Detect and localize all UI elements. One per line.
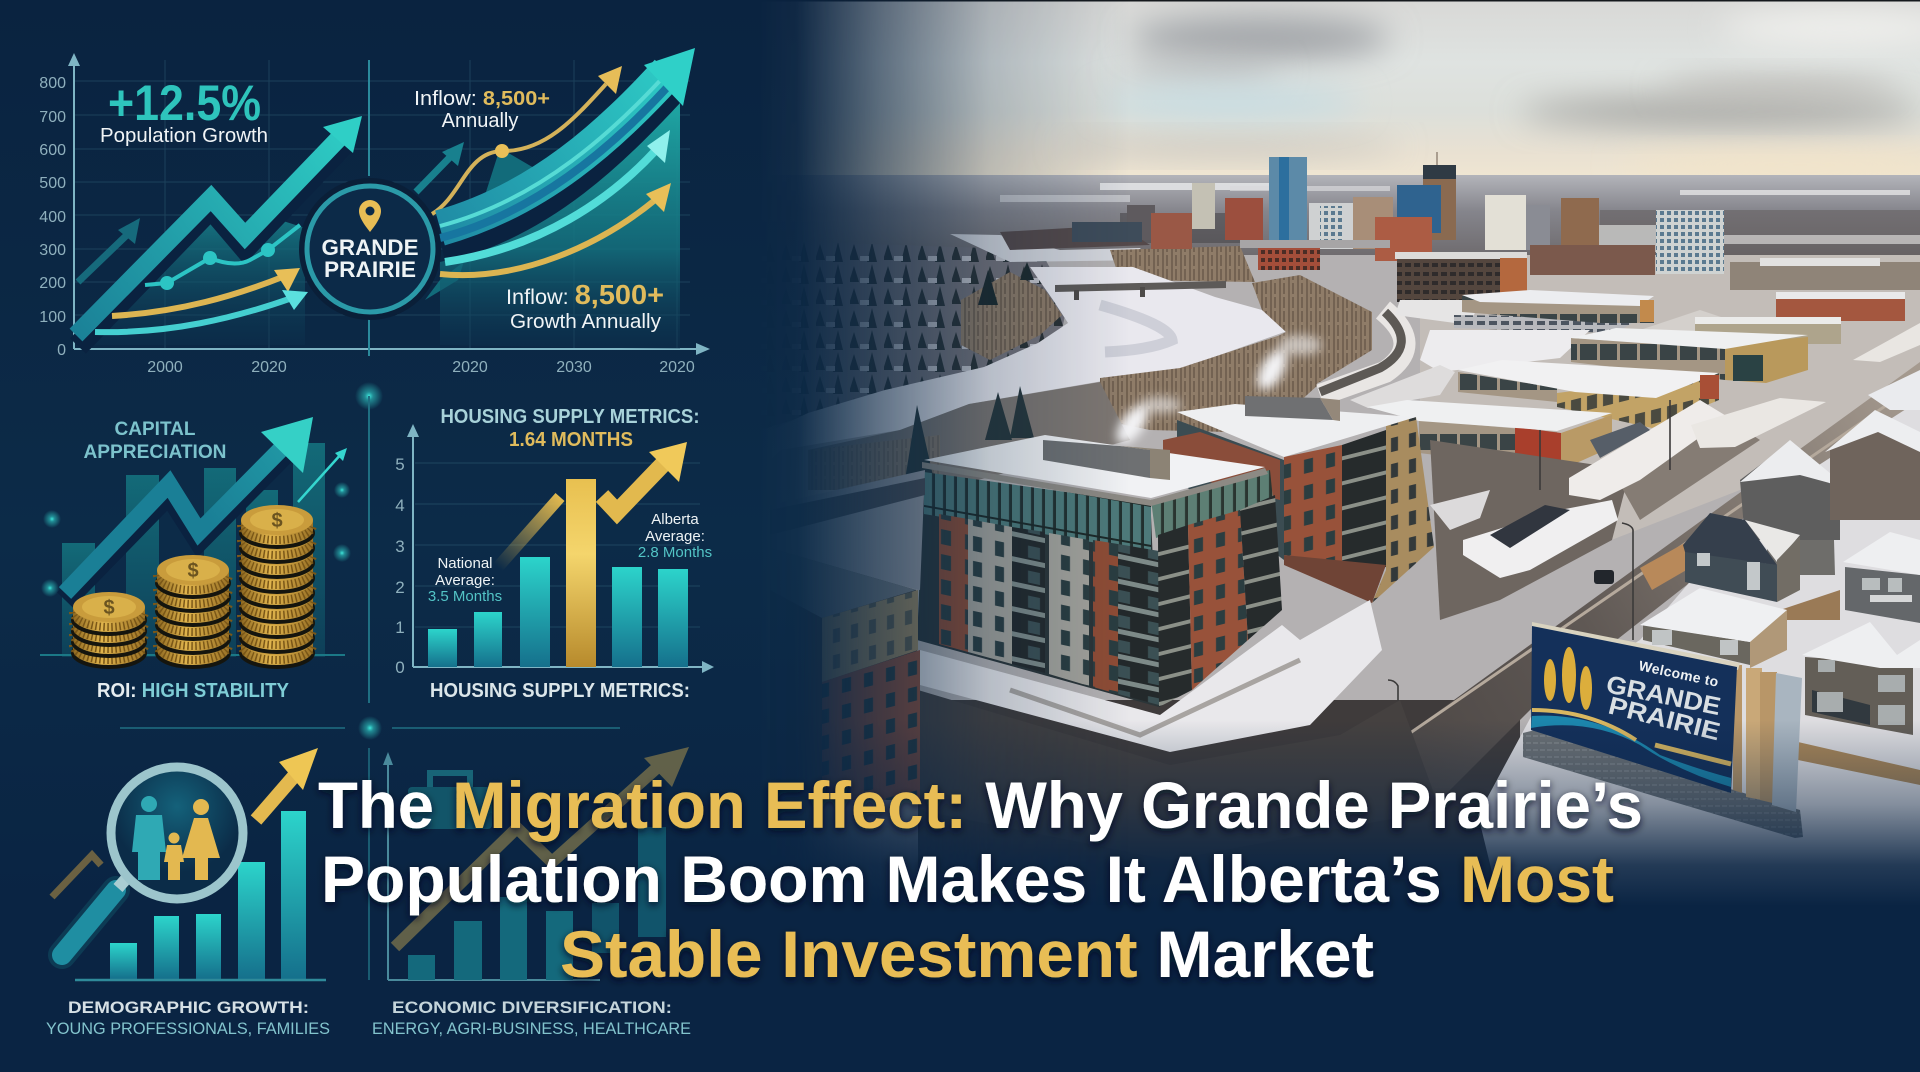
y axis labels bbox=[395, 455, 405, 677]
apartment building B bbox=[1163, 396, 1434, 603]
panel: capital appreciation bbox=[40, 417, 351, 702]
stat: population growth: Population Growth bbox=[100, 125, 268, 147]
small arrow right bbox=[416, 142, 464, 192]
stat: population growth: +12.5% bbox=[108, 75, 261, 131]
panel: economic diversification bbox=[369, 747, 691, 1038]
lower left bank bbox=[808, 382, 1130, 490]
y axis labels: 3 bbox=[395, 537, 405, 556]
heading: capital appreciation: CAPITAL bbox=[114, 419, 196, 440]
icon: briefcase bbox=[408, 773, 492, 829]
gold arrow right bbox=[440, 183, 671, 275]
icon: woman figure bbox=[182, 799, 220, 880]
heading: housing supply: HOUSING SUPPLY METRICS: bbox=[440, 406, 700, 428]
house H5 bbox=[1843, 532, 1920, 623]
panel: population growth chart bbox=[39, 48, 710, 376]
bars bbox=[428, 557, 688, 667]
label: inflow lower bbox=[506, 279, 664, 333]
brown bank trees west bbox=[961, 262, 1062, 360]
thin gold arrow bbox=[432, 66, 622, 214]
cross street bbox=[918, 690, 1440, 860]
icon: wheat stalks bbox=[1544, 647, 1592, 710]
highlighted gold bar bbox=[566, 479, 596, 667]
bars bbox=[110, 811, 306, 979]
location badge: GRANDE bbox=[322, 235, 418, 260]
x axis labels: 2000 bbox=[147, 359, 183, 376]
welcome sign: Welcome to bbox=[1637, 657, 1720, 690]
faded arrow bbox=[395, 747, 689, 947]
x axis labels: 2030 bbox=[556, 359, 592, 376]
y axis labels: 700 bbox=[39, 109, 66, 126]
welcome sign bbox=[1523, 622, 1803, 838]
snow field and parking bbox=[1350, 300, 1730, 408]
gold arrow bbox=[256, 748, 318, 820]
y axis labels: 600 bbox=[39, 142, 66, 159]
y axis labels: 200 bbox=[39, 275, 66, 292]
baseline bbox=[40, 654, 345, 656]
caption: housing supply: HOUSING SUPPLY METRICS: bbox=[430, 680, 690, 702]
cyan line with dots bbox=[145, 225, 300, 290]
zigzag arrow bbox=[65, 417, 313, 600]
east bank trees bbox=[1250, 275, 1372, 395]
caption: economic diversification: ECONOMIC DIVERSIFICATION: bbox=[392, 998, 672, 1017]
coin stack medium bbox=[155, 555, 231, 669]
y axis labels: 2 bbox=[395, 578, 405, 597]
welcome sign: GRANDE bbox=[1604, 670, 1723, 721]
title: The Migration Effect: Why Grande Prairie’s bbox=[318, 768, 1643, 842]
photo left fade bbox=[761, 0, 1108, 890]
background bars bbox=[62, 443, 325, 657]
y axis labels: 800 bbox=[39, 75, 66, 92]
strip 3 bbox=[1695, 317, 1841, 344]
retail strips bbox=[1367, 290, 1905, 470]
left foreground building bbox=[770, 548, 920, 800]
label: alberta average: Alberta bbox=[651, 511, 699, 528]
spruce trees bbox=[905, 386, 1034, 480]
label: national average: 3.5 Months bbox=[428, 588, 502, 605]
strip 6 bbox=[1367, 400, 1612, 470]
baseline bbox=[75, 979, 326, 981]
coin stack small bbox=[71, 592, 147, 669]
houses bbox=[1640, 370, 1920, 735]
y axis labels: 400 bbox=[39, 209, 66, 226]
house upper far right bbox=[1740, 370, 1920, 540]
icon: location pin bbox=[359, 200, 381, 232]
x axis labels: 2020 bbox=[659, 359, 695, 376]
divider glow top bbox=[355, 382, 383, 410]
title bbox=[318, 768, 1643, 991]
caption: economic diversification bbox=[372, 998, 691, 1038]
y axis labels: 500 bbox=[39, 175, 66, 192]
label: inflow upper bbox=[414, 88, 550, 132]
left panel background bbox=[0, 0, 761, 1072]
y axis labels: 0 bbox=[395, 658, 405, 677]
label: national average: Average: bbox=[435, 572, 495, 589]
y axis labels: 300 bbox=[39, 242, 66, 259]
coin stack large: $ bbox=[271, 510, 283, 532]
gold arrow rising to bar bbox=[498, 497, 560, 567]
location badge bbox=[299, 178, 441, 320]
house H4 bbox=[1802, 622, 1920, 735]
snow area behind left building bbox=[770, 470, 925, 590]
mid-rise apartment bbox=[1395, 252, 1527, 302]
steam plumes bbox=[1110, 335, 1322, 449]
road network bbox=[1130, 362, 1920, 835]
curving road east of river bbox=[1320, 310, 1405, 395]
caption: economic diversification: ENERGY, AGRI-BUSINESS, HEALTHCARE bbox=[372, 1019, 691, 1038]
ground base bbox=[760, 255, 1920, 905]
title: Population Boom Makes It Alberta’s Most bbox=[321, 842, 1614, 916]
axes bbox=[383, 752, 600, 980]
label: national average bbox=[428, 555, 502, 605]
photo: aerial winter view of Grande Prairie bbox=[766, 0, 1920, 894]
faded arrow bbox=[52, 855, 101, 897]
y axis labels: 5 bbox=[395, 455, 405, 474]
strip 5 bbox=[1458, 360, 1719, 428]
house back bbox=[1767, 495, 1835, 575]
snow medians and parked cars bbox=[1430, 323, 1920, 584]
caption: demographic growth: DEMOGRAPHIC GROWTH: bbox=[68, 998, 309, 1017]
house H3 behind sign bbox=[1640, 588, 1787, 668]
panel: demographic growth bbox=[46, 748, 330, 1038]
label: inflow upper: Annually bbox=[442, 110, 518, 132]
light cyan arrow bbox=[445, 130, 670, 262]
thin arrow bbox=[298, 448, 347, 502]
west bank with conifers and houses bbox=[760, 240, 1068, 430]
icon: child figure bbox=[164, 832, 184, 880]
heading: housing supply: 1.64 MONTHS bbox=[509, 429, 633, 451]
chart grid and axes bbox=[68, 53, 710, 356]
heading: housing supply bbox=[440, 406, 700, 451]
label: alberta average: 2.8 Months bbox=[638, 544, 712, 561]
location badge: PRAIRIE bbox=[324, 257, 416, 282]
photo bottom fade bbox=[760, 720, 1920, 906]
large curved arrow right bbox=[440, 48, 695, 240]
panel: housing supply metrics bbox=[395, 406, 714, 702]
gold arrow left bbox=[112, 268, 300, 316]
snow plaza around building bbox=[920, 600, 1382, 752]
street lamps bbox=[1388, 400, 1670, 735]
label: inflow lower: Growth Annually bbox=[510, 311, 661, 333]
x axis labels bbox=[147, 359, 695, 376]
x axis labels: 2020 bbox=[452, 359, 488, 376]
left small arrow bbox=[78, 218, 140, 282]
cyan arrow left bbox=[95, 290, 308, 332]
label: inflow lower: Inflow: 8,500+ bbox=[506, 279, 664, 310]
caption: demographic growth bbox=[46, 998, 330, 1038]
bridge bbox=[1055, 281, 1226, 300]
right hill area bbox=[425, 148, 546, 300]
horizontal divider bbox=[120, 716, 620, 740]
coin stack medium: $ bbox=[187, 560, 199, 582]
apartment building A bbox=[917, 435, 1282, 707]
downtown skyline bbox=[1072, 152, 1920, 290]
suburban snowy ground bbox=[1478, 400, 1920, 905]
heading: capital appreciation bbox=[84, 419, 226, 463]
y axis labels: 1 bbox=[395, 618, 405, 637]
frozen river bbox=[760, 267, 1290, 470]
panel divider vertical bbox=[368, 396, 370, 703]
glow dots bbox=[41, 482, 351, 597]
icon: magnifying glass with family bbox=[62, 767, 243, 955]
y axis labels: 100 bbox=[39, 309, 66, 326]
distant snowy land bbox=[760, 175, 1920, 265]
title: Stable Investment Market bbox=[560, 917, 1374, 991]
gold arrow after bar bbox=[602, 442, 687, 512]
strip 4 bbox=[1571, 328, 1808, 383]
coin stack small: $ bbox=[103, 597, 115, 619]
caption: demographic growth: YOUNG PROFESSIONALS, FAMILIES bbox=[46, 1019, 330, 1038]
sky with clouds bbox=[0, 0, 1920, 180]
x axis labels: 2020 bbox=[251, 359, 287, 376]
strip 2 bbox=[1776, 292, 1905, 321]
label: alberta average bbox=[638, 511, 712, 561]
welcome sign: PRAIRIE bbox=[1606, 692, 1723, 746]
lower bare trees bbox=[1100, 332, 1318, 433]
label: national average: National bbox=[437, 555, 493, 572]
caption: ROI: ROI: HIGH STABILITY bbox=[97, 680, 290, 702]
y axis labels: 4 bbox=[395, 496, 405, 515]
bars bbox=[408, 827, 666, 980]
y axis labels bbox=[39, 75, 66, 359]
upper river and far trees bbox=[950, 225, 1255, 282]
label: alberta average: Average: bbox=[645, 528, 705, 545]
vertical line bbox=[368, 748, 370, 980]
label: inflow upper: Inflow: 8,500+ bbox=[414, 88, 550, 110]
heading: capital appreciation: APPRECIATION bbox=[84, 442, 226, 463]
icon: adult figure bbox=[132, 796, 166, 880]
house H1 dark bbox=[1683, 513, 1800, 602]
coin stack large bbox=[239, 505, 315, 669]
grid and axes bbox=[407, 424, 714, 673]
left area fill bbox=[78, 215, 305, 345]
y axis labels: 0 bbox=[57, 342, 66, 359]
main zigzag arrow left bbox=[76, 116, 362, 346]
strip 1 bbox=[1462, 290, 1654, 323]
